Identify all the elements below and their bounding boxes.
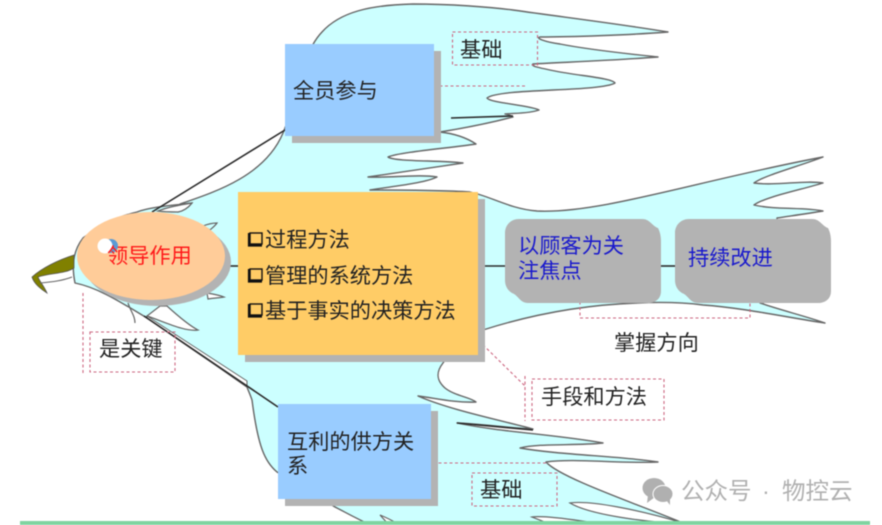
checkbox list xyxy=(249,228,456,323)
callout: 基础 top: 基础 xyxy=(460,38,502,62)
checkbox list: 基于事实的决策方法 xyxy=(265,299,456,323)
callout: 基础 top xyxy=(452,32,538,65)
panel: 互利的供方关系 xyxy=(278,404,438,506)
watermark text: 物控云 xyxy=(782,478,852,504)
callout: 手段和方法 xyxy=(532,379,664,420)
connector lines xyxy=(144,116,675,430)
panel: 以顾客为关注焦点: 以顾客为关 xyxy=(518,234,624,258)
panel: 全员参与: 全员参与 xyxy=(293,79,378,103)
panel: 以顾客为关注焦点 xyxy=(505,219,661,303)
callout: 是关键: 是关键 xyxy=(99,337,163,361)
dashed annotation connectors xyxy=(83,86,750,463)
icon: small ball xyxy=(98,238,118,254)
panel: 互利的供方关系: 系 xyxy=(287,454,308,478)
callout: 手段和方法: 手段和方法 xyxy=(541,385,647,409)
watermark text: 公众号 xyxy=(681,478,752,504)
checkbox list: 过程方法 xyxy=(265,228,350,252)
panel: 领导作用 ellipse: 领导作用 xyxy=(107,244,192,268)
lower neck white gap xyxy=(147,316,247,387)
panel: 全员参与 xyxy=(285,44,441,143)
footer green bar xyxy=(20,521,870,525)
panel: methods xyxy=(238,192,485,362)
panel: 互利的供方关系: 互利的供方关 xyxy=(287,430,414,454)
icon: chat bubbles xyxy=(642,478,673,505)
panel: 领导作用 ellipse xyxy=(77,212,231,306)
panel: 持续改进 xyxy=(675,219,831,303)
white feather slivers xyxy=(128,203,683,525)
panel: 持续改进: 持续改进 xyxy=(688,246,773,270)
checkbox list: 管理的系统方法 xyxy=(265,264,413,288)
callout: 是关键 xyxy=(90,332,175,372)
watermark xyxy=(642,478,852,505)
callout: 基础 bottom xyxy=(472,473,557,506)
callout: 基础 bottom: 基础 xyxy=(480,478,522,502)
panel: 以顾客为关注焦点: 注焦点 xyxy=(518,259,582,283)
label: 掌握方向: 掌握方向 xyxy=(614,331,699,355)
beak xyxy=(32,255,74,293)
watermark text: · xyxy=(762,478,770,504)
